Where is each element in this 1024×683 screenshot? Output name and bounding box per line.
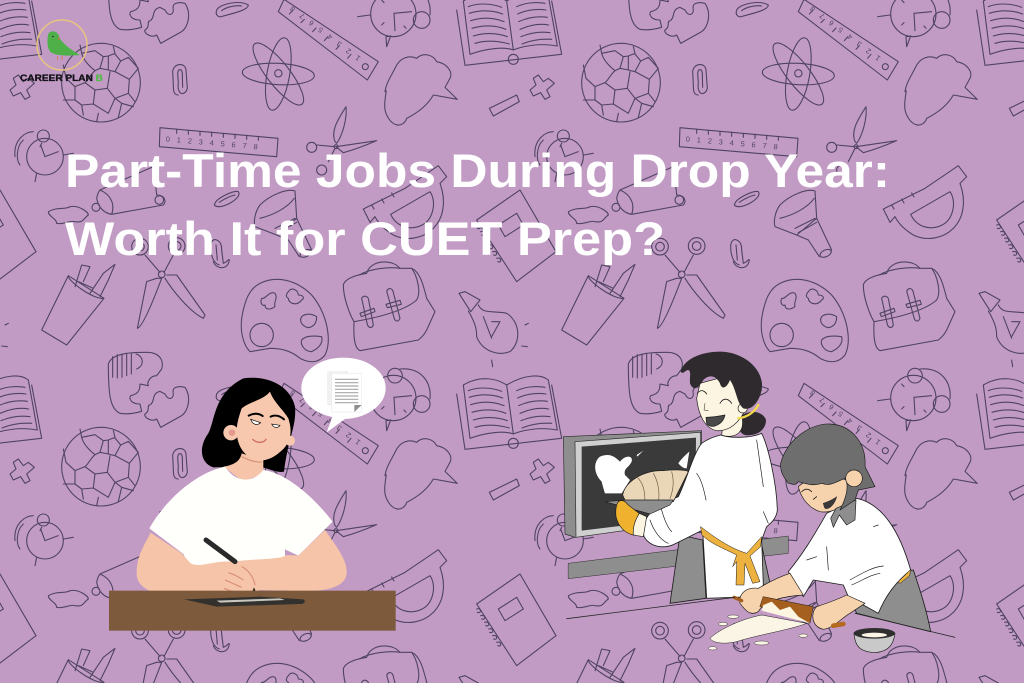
baker 2: shirt xyxy=(788,498,911,613)
baker 1: hair bun xyxy=(739,412,766,435)
rolling pin xyxy=(734,597,742,601)
baker 2: hair xyxy=(781,424,875,510)
baker 1: yellow hair tie xyxy=(738,405,758,418)
neck xyxy=(223,453,263,482)
logo wordmark: CAREER PLAN B xyxy=(20,73,103,84)
desk xyxy=(109,591,396,631)
icon: bird in circle xyxy=(37,20,87,70)
illustration: student writing at desk xyxy=(109,358,396,631)
baker 2: face and collar xyxy=(798,476,852,512)
dough xyxy=(710,615,807,643)
oven xyxy=(563,431,702,537)
baker 1: apron strings xyxy=(701,527,762,585)
speech bubble with document icon xyxy=(301,358,386,432)
oven mitt xyxy=(616,501,640,535)
pen xyxy=(206,540,235,562)
baker 1: hair xyxy=(681,352,762,409)
title: Worth It for CUET Prep? xyxy=(65,212,665,265)
tablet xyxy=(184,597,305,607)
table edge lines xyxy=(567,597,955,637)
baker 1: white coat xyxy=(643,433,777,598)
title: Part-Time Jobs During Drop Year: xyxy=(65,144,890,197)
t-shirt xyxy=(149,467,333,567)
hair xyxy=(202,378,295,472)
face xyxy=(237,392,291,460)
logo: Career Plan B xyxy=(20,20,103,84)
counter xyxy=(568,536,788,579)
baker 2: arms and hands xyxy=(740,573,803,613)
bowl xyxy=(854,628,895,653)
arms xyxy=(137,530,347,599)
baker 1: apron skirt xyxy=(670,535,770,603)
baker 1: neck and face xyxy=(722,415,743,436)
title xyxy=(65,144,890,265)
bread and tray xyxy=(623,470,688,503)
baker 2: apron xyxy=(843,570,931,632)
illustration: two bakers in a kitchen xyxy=(563,352,955,653)
